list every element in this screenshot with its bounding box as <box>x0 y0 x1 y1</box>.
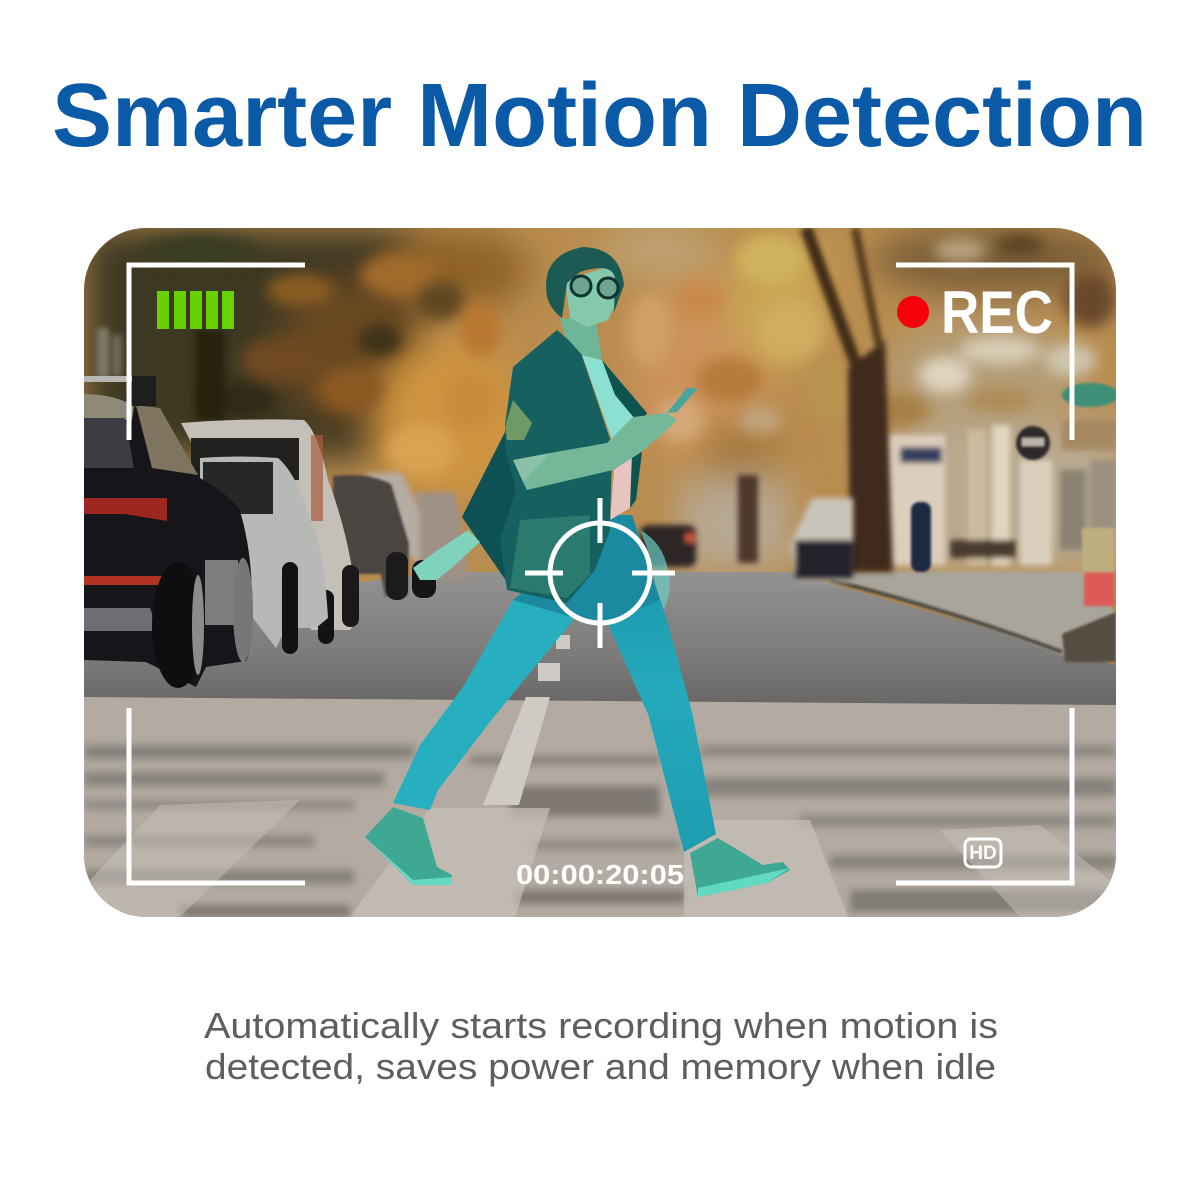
forearm and hand <box>523 413 677 490</box>
shirt <box>582 355 634 438</box>
glasses <box>571 276 618 298</box>
front shoe <box>365 807 452 885</box>
battery indicator <box>157 291 234 329</box>
title: Smarter Motion Detection <box>52 66 1147 166</box>
caption: detected, saves power and memory when idle <box>205 1046 996 1087</box>
recording indicator: REC <box>941 279 1053 346</box>
far sidewalk <box>810 572 1116 660</box>
jacket <box>500 330 612 603</box>
rear leg <box>600 515 716 852</box>
recording indicator <box>897 290 1052 334</box>
jacket pocket <box>510 515 590 598</box>
crosshair target <box>525 498 675 648</box>
phone <box>667 388 698 413</box>
timecode: 00:00:20:05 <box>516 859 684 890</box>
parked cars <box>84 376 467 688</box>
camera viewfinder photo panel <box>84 220 1130 917</box>
viewfinder corner brackets <box>129 265 1072 883</box>
neck <box>560 318 602 360</box>
shoulder bag <box>462 432 516 580</box>
distant pedestrian <box>911 502 931 572</box>
jeans hip <box>513 515 660 622</box>
tree trunks and branches <box>97 228 893 572</box>
pavement shadow streaks <box>84 745 1116 917</box>
sleeve cuff <box>513 453 550 482</box>
elbow patch <box>505 400 532 440</box>
distant cars <box>640 498 853 582</box>
caption <box>204 1005 998 1087</box>
road surface <box>84 572 1116 705</box>
woman highlighted in teal <box>365 247 790 897</box>
autumn leaf bokeh texture <box>140 234 1116 476</box>
cream buildings <box>885 420 1116 565</box>
faint teal arc behind target <box>640 530 670 610</box>
crossing blocks and lane marks <box>84 635 1116 917</box>
face <box>566 268 615 327</box>
HD badge <box>965 839 1001 867</box>
front leg <box>393 560 622 810</box>
pink blouse <box>610 455 632 520</box>
lower hand <box>413 530 480 580</box>
crosswalk pavement <box>84 697 1116 917</box>
street signs <box>1016 383 1118 606</box>
HD badge: HD <box>969 843 997 864</box>
rear shoe <box>690 838 790 897</box>
hair <box>546 247 624 318</box>
street scene background <box>84 220 1130 917</box>
caption: Automatically starts recording when motion is <box>204 1005 998 1046</box>
